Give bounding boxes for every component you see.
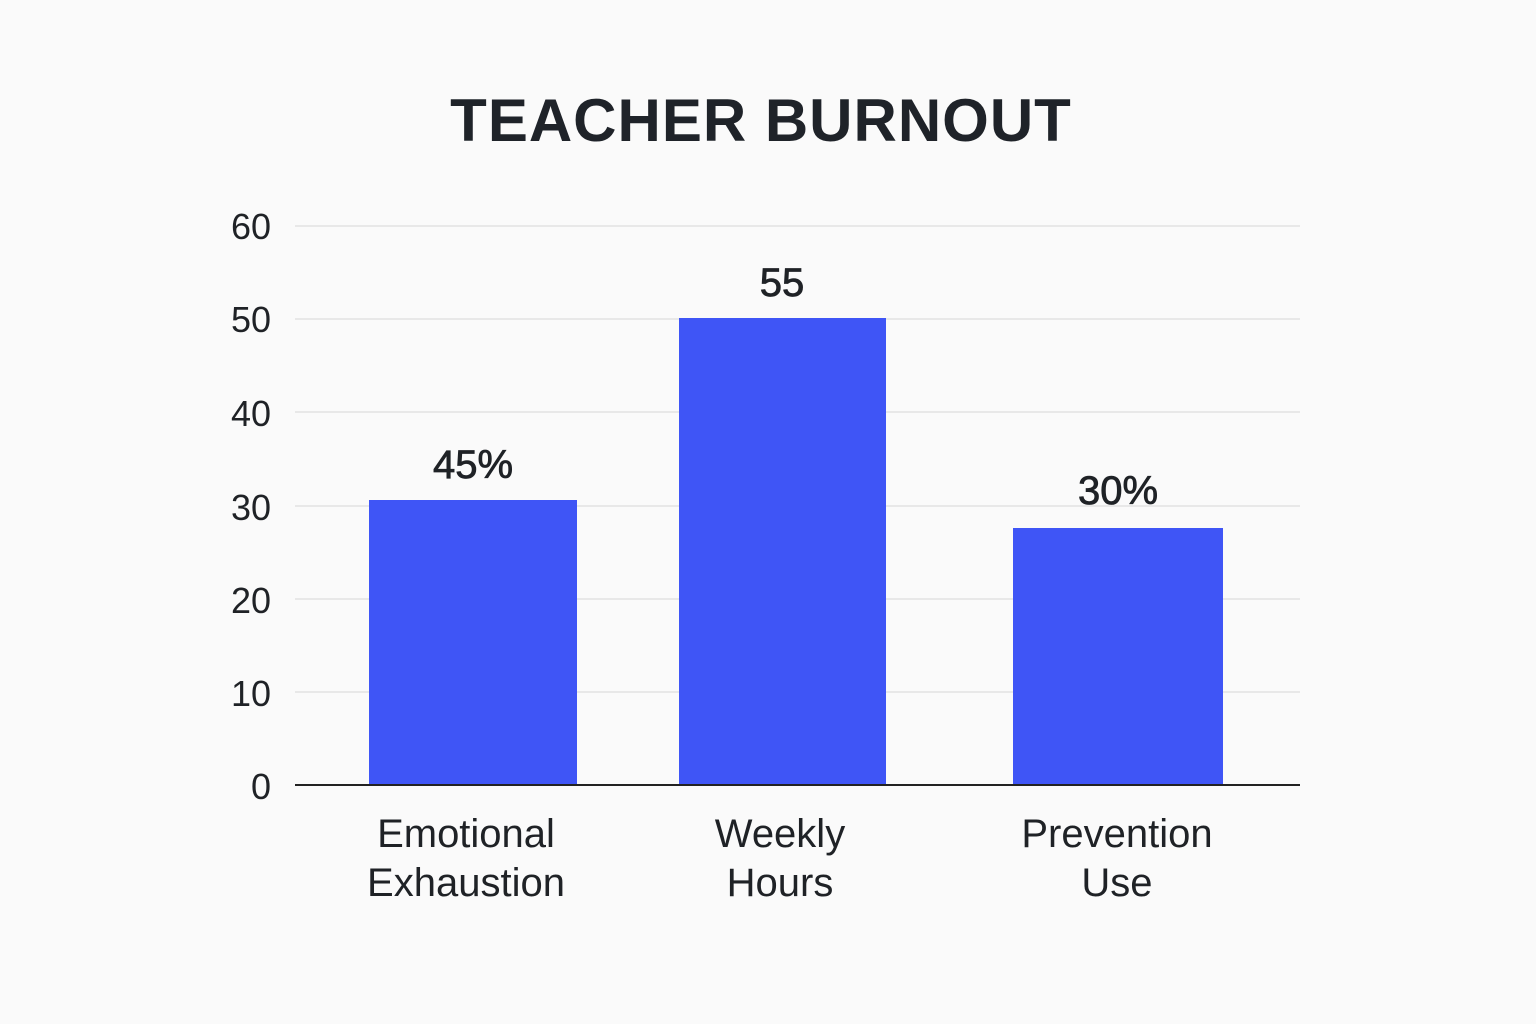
y axis labels: 10 — [231, 673, 271, 714]
category labels — [367, 812, 1213, 905]
y axis labels: 50 — [231, 299, 271, 340]
y axis labels: 20 — [231, 580, 271, 621]
y axis labels: 30 — [231, 487, 271, 528]
y axis labels: 0 — [251, 766, 271, 807]
y axis labels: 40 — [231, 393, 271, 434]
category labels: Exhaustion — [367, 861, 565, 905]
category labels: Use — [1081, 861, 1153, 905]
value labels — [433, 261, 1158, 513]
value labels: 55 — [760, 261, 804, 305]
value labels: 30% — [1078, 469, 1158, 513]
category labels: Hours — [727, 861, 833, 905]
category labels: Weekly — [715, 812, 845, 856]
y axis labels: 60 — [231, 206, 271, 247]
category labels: Prevention — [1021, 812, 1213, 856]
value labels: 45% — [433, 443, 513, 487]
category labels: Emotional — [377, 812, 555, 856]
title: TEACHER BURNOUT — [450, 87, 1072, 154]
bars — [369, 318, 1223, 785]
y axis labels — [231, 206, 271, 807]
